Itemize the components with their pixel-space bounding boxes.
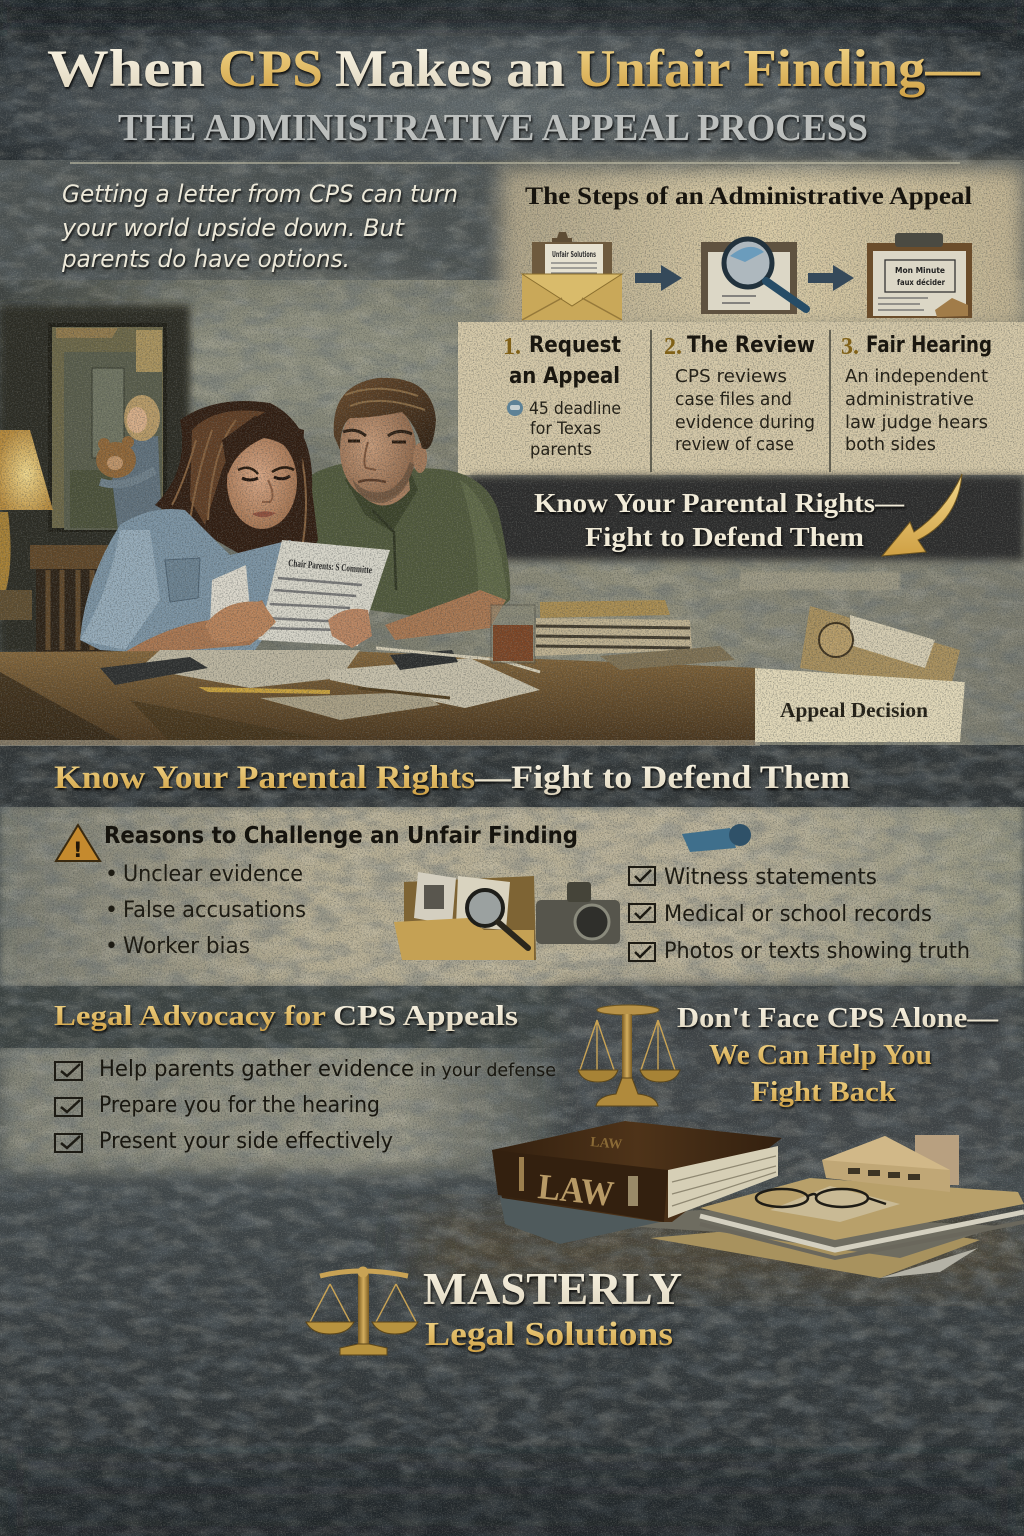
title: Makes an (335, 40, 565, 98)
step 3: both sides (845, 434, 936, 455)
intro text: parents do have options. (61, 245, 350, 273)
step 2: The Review (687, 333, 815, 358)
step 3: law judge hears (845, 412, 988, 433)
step 3: 3. (841, 334, 859, 360)
title: Unfair Finding— (576, 40, 981, 98)
reasons list: Unclear evidence (123, 862, 303, 887)
logo: Legal Solutions (425, 1316, 673, 1353)
evidence checklist: Photos or texts showing truth (664, 939, 970, 964)
callout: know your parental rights: Know Your Parental Rights— (534, 488, 905, 518)
step 2: review of case (675, 434, 794, 455)
arrow: gold curved (882, 474, 962, 556)
logo (306, 1263, 682, 1355)
step 3: administrative (845, 389, 974, 410)
illustration: table with papers (0, 648, 760, 746)
checkbox icons (629, 867, 655, 961)
title: When (47, 40, 205, 98)
legal advocacy checklist: Present your side effectively (99, 1129, 393, 1154)
callout: know your parental rights (534, 488, 905, 552)
illustration: man (300, 378, 510, 640)
icon: envelope with letter (522, 232, 622, 320)
step 3: Fair Hearing (866, 333, 992, 358)
step 1: Request (529, 333, 621, 358)
intro text (61, 180, 458, 273)
title (47, 40, 981, 98)
illustration: law book: LAW (536, 1166, 616, 1214)
illustration: letter in hands (205, 540, 390, 648)
child (96, 395, 162, 530)
title: CPS (218, 40, 323, 98)
icon: warning triangle (56, 825, 100, 862)
evidence checklist: Medical or school records (664, 902, 932, 927)
callout: dont face cps alone: We Can Help You (709, 1039, 932, 1071)
step 1: parents (530, 440, 592, 460)
reasons list: • (105, 934, 118, 959)
reasons list: Worker bias (123, 934, 250, 959)
icon: evidence folder with magnifier (394, 872, 536, 960)
evidence checklist: Witness statements (664, 865, 877, 890)
step 2: case files and (675, 389, 792, 410)
reasons list: False accusations (123, 898, 306, 923)
checkbox icons (55, 1062, 82, 1152)
reasons list (105, 862, 306, 959)
illustration: law book (492, 1121, 782, 1244)
section heading: know your parental rights (54, 760, 850, 796)
legal advocacy checklist (55, 1057, 556, 1154)
callout: dont face cps alone: Don't Face CPS Alone— (677, 1002, 999, 1034)
panel: steps parchment (500, 168, 1024, 328)
callout: dont face cps alone: Fight Back (751, 1076, 897, 1108)
divider (651, 330, 830, 472)
title rule (70, 162, 960, 164)
illustration: table lamp (0, 430, 53, 620)
icon: clipboard (867, 233, 972, 318)
intro text: your world upside down. But (61, 214, 406, 242)
step 1 (503, 333, 621, 460)
step 1: 45 deadline (529, 399, 621, 419)
illustration: glass of tea (491, 605, 535, 663)
logo: MASTERLY (423, 1263, 682, 1314)
intro text: Getting a letter from CPS can turn (62, 180, 458, 208)
icon: glasses (756, 1189, 886, 1207)
step 2: 2. (664, 334, 682, 360)
icon: scales of justice (578, 1005, 680, 1106)
icon: model house (822, 1135, 959, 1192)
icon: clipboard: faux décider (897, 277, 945, 287)
legal advocacy checklist: Help parents gather evidence (99, 1057, 414, 1082)
step 2: evidence during (675, 412, 815, 433)
arrow: step 2 to 3 (808, 265, 854, 291)
legal advocacy heading: Legal Advocacy for (54, 1000, 326, 1032)
legal advocacy checklist: in your defense (420, 1060, 556, 1081)
illustration: appeal decision folder: Appeal Decision (780, 698, 928, 722)
step 2 (664, 333, 815, 455)
reasons heading: Reasons to Challenge an Unfair Finding (104, 823, 578, 849)
illustration: stack of documents (535, 600, 735, 670)
callout: know your parental rights: Fight to Defend Them (585, 522, 865, 552)
step 3: An independent (845, 366, 988, 387)
panel: steps columns parchment (458, 322, 1024, 475)
legal advocacy checklist: Prepare you for the hearing (99, 1093, 380, 1118)
subtitle: THE ADMINISTRATIVE APPEAL PROCESS (118, 107, 868, 149)
illustration: door with child (50, 325, 165, 530)
icon: blue cassette (682, 824, 751, 852)
illustration: law book: LAW (590, 1135, 623, 1153)
illustration: wooden chair (30, 545, 120, 654)
icon: envelope with letter: Unfair Solutions (552, 250, 596, 259)
step 3 (841, 333, 992, 455)
steps heading: The Steps of an Administrative Appeal (525, 183, 972, 210)
illustration: papers under book (560, 1178, 1024, 1278)
icon: camera (536, 882, 620, 944)
icon: clipboard: Mon Minute (895, 266, 946, 275)
illustration: letter in hands: Chair Parents: S Committe (288, 558, 373, 576)
evidence checklist (629, 865, 970, 964)
step 1: for Texas (530, 419, 601, 439)
reasons list: • (105, 862, 118, 887)
illustration: woman (80, 401, 318, 660)
icon: document with magnifier (701, 239, 806, 314)
icon: logo scales (306, 1267, 418, 1355)
legal advocacy heading: CPS Appeals (333, 1000, 518, 1032)
arrow: step 1 to 2 (635, 265, 682, 291)
step 2: CPS reviews (675, 366, 787, 387)
wall behind couple (0, 305, 190, 655)
panel: dark rights band (470, 476, 1024, 560)
illustration: appeal decision folder (755, 606, 965, 742)
step 1: an Appeal (509, 364, 620, 389)
reasons list: • (105, 898, 118, 923)
step 1: 1. (503, 334, 521, 360)
icon: warning triangle: ! (73, 838, 83, 862)
section heading: know your parental rights: —Fight to Defend Them (474, 760, 850, 796)
section heading: know your parental rights: Know Your Parental Rights (54, 760, 475, 796)
callout: dont face cps alone (677, 1002, 999, 1108)
legal advocacy heading (54, 1000, 518, 1032)
divider strip above folder (740, 572, 900, 590)
